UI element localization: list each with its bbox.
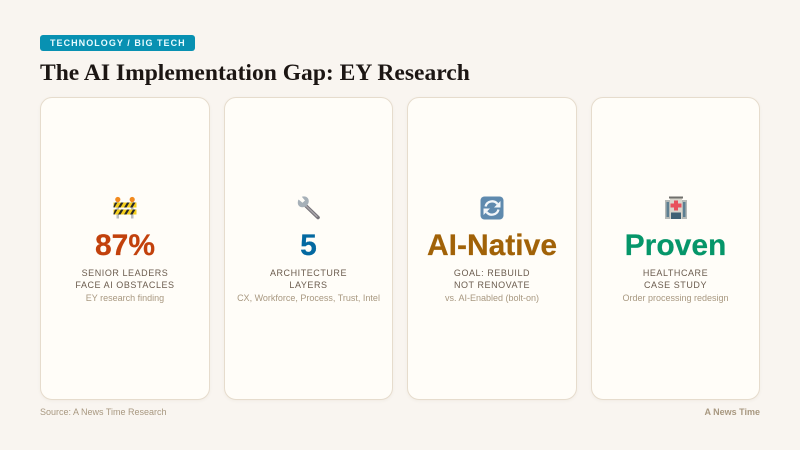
stat note: vs. AI-Enabled (bolt-on) <box>445 293 539 303</box>
panel: proven healthcare case study <box>591 97 760 400</box>
panel: 87% senior leaders <box>40 97 210 400</box>
stat value: 87% <box>95 229 155 262</box>
icon: construction barrier <box>114 196 136 218</box>
stat label: LAYERS <box>289 280 328 290</box>
stat label: NOT RENOVATE <box>454 280 530 290</box>
stat note: EY research finding <box>86 293 164 303</box>
icon: wrench <box>298 196 320 220</box>
stat label: SENIOR LEADERS <box>82 268 168 278</box>
title: The AI Implementation Gap: EY Research <box>40 60 470 85</box>
stat label: HEALTHCARE <box>643 268 708 278</box>
category badge: TECHNOLOGY / BIG TECH <box>50 38 186 48</box>
stat label: ARCHITECTURE <box>270 268 347 278</box>
panel: AI-Native goal <box>407 97 577 400</box>
category badge <box>40 35 195 51</box>
stat label <box>643 268 708 290</box>
stat label: GOAL: REBUILD <box>454 268 530 278</box>
panel: 5 architecture layers <box>224 97 393 400</box>
stat note: Order processing redesign <box>622 293 729 303</box>
stat label <box>454 268 530 290</box>
icon: rebuild arrows <box>480 196 504 220</box>
stat value: AI-Native <box>427 229 557 262</box>
source footer: Source: A News Time Research <box>40 407 167 417</box>
stat label: CASE STUDY <box>644 280 707 290</box>
stat value: 5 <box>300 229 317 262</box>
stat note: CX, Workforce, Process, Trust, Intel <box>237 293 380 303</box>
stat value: Proven <box>625 229 726 262</box>
stat label <box>75 268 175 290</box>
brand footer: A News Time <box>704 407 760 417</box>
stat label: FACE AI OBSTACLES <box>75 280 175 290</box>
stat label <box>270 268 347 290</box>
icon: hospital <box>665 196 687 219</box>
